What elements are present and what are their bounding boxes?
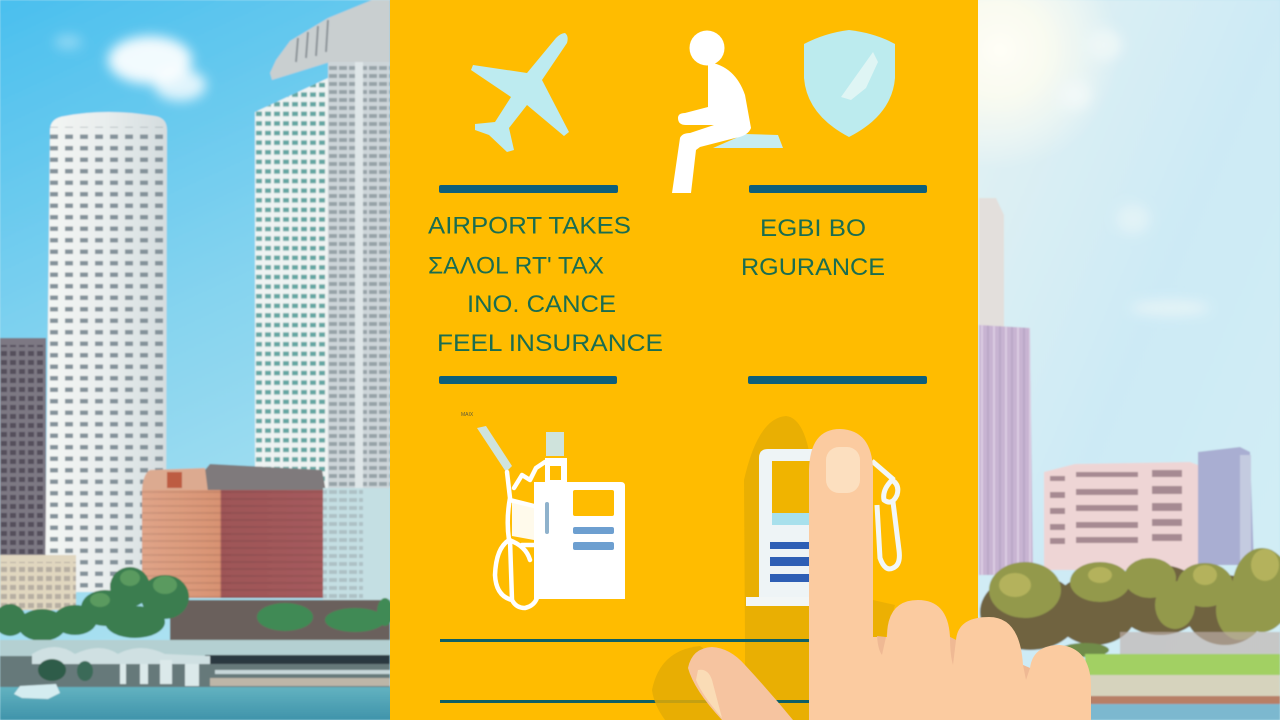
icon: fuel pump left: [477, 426, 625, 608]
rocky shore: [1088, 675, 1280, 705]
hose outline: [495, 462, 545, 608]
hand: [652, 429, 1091, 720]
text: left column: INO. CANCE: [467, 291, 616, 318]
rule: top left: [439, 185, 618, 193]
shadow behind pump: [744, 416, 812, 720]
seat: [713, 134, 783, 148]
icon: fuel pump right: [744, 416, 899, 720]
pump top cap: [546, 432, 564, 456]
finger creases: [877, 636, 1030, 680]
thumb: [688, 647, 793, 720]
icon: seated person: [672, 30, 783, 193]
shadow right of finger: [873, 600, 895, 640]
pump bars: [573, 527, 614, 550]
grass: [1085, 654, 1280, 676]
right clouds: [1059, 29, 1210, 316]
text: left column: FEEL INSURANCE: [437, 330, 663, 357]
pump inner accent: [545, 502, 549, 534]
right sky: [976, 0, 1280, 720]
round tower: [45, 112, 167, 592]
rule: middle right: [748, 376, 927, 384]
pale tower: [979, 198, 1033, 575]
left clouds: [54, 35, 206, 101]
text: left column: ΣAΛOL RT' TAX: [428, 252, 604, 280]
pump neck opening: [550, 466, 561, 480]
right city photo: [880, 0, 1280, 720]
right water: [1088, 704, 1280, 720]
pump stripes: [770, 542, 814, 582]
rule: lower thin 1: [440, 639, 810, 642]
pump base: [746, 597, 816, 606]
hose: [872, 461, 899, 569]
text: left column: AIRPORT TAKES: [428, 212, 631, 240]
icon: airplane: [471, 33, 569, 152]
rule: lower thin 2: [440, 700, 810, 703]
red low building: [142, 464, 326, 598]
pump body: [759, 449, 815, 597]
icon: shield: [804, 30, 895, 137]
hose body fill: [512, 502, 534, 540]
boat: [14, 684, 60, 699]
pump window: [772, 461, 814, 513]
yellow panel: [390, 0, 978, 720]
pump window: [573, 490, 614, 516]
fingers: [809, 429, 1091, 720]
pump display band: [772, 513, 814, 525]
body: [672, 62, 751, 193]
thumb shadow: [652, 646, 725, 720]
blue tower: [1198, 447, 1254, 565]
tall office tower: [255, 0, 390, 610]
right trees: [980, 548, 1280, 657]
left trees: [0, 567, 393, 642]
glass building: [323, 488, 390, 610]
beige low building: [0, 555, 76, 610]
fingernail: [826, 447, 860, 493]
sun glare: [880, 0, 1120, 170]
head: [690, 30, 724, 66]
pink building: [1044, 462, 1198, 570]
rule: top right: [749, 185, 927, 193]
thumb nail: [696, 670, 722, 718]
water: [0, 687, 392, 720]
text: right column: RGURANCE: [741, 254, 885, 281]
waterfront pier: [0, 640, 390, 687]
text: right column: EGBI BO: [760, 215, 866, 242]
dark tower: [0, 338, 46, 556]
text: left column: [428, 212, 663, 357]
pump body: [534, 458, 625, 599]
text: right column: [741, 215, 885, 281]
left city photo: [0, 0, 393, 720]
rule: middle left: [439, 376, 617, 384]
nozzle: [477, 426, 512, 472]
left sky: [0, 0, 392, 720]
small mark above nozzle: MAIX: [461, 412, 474, 418]
